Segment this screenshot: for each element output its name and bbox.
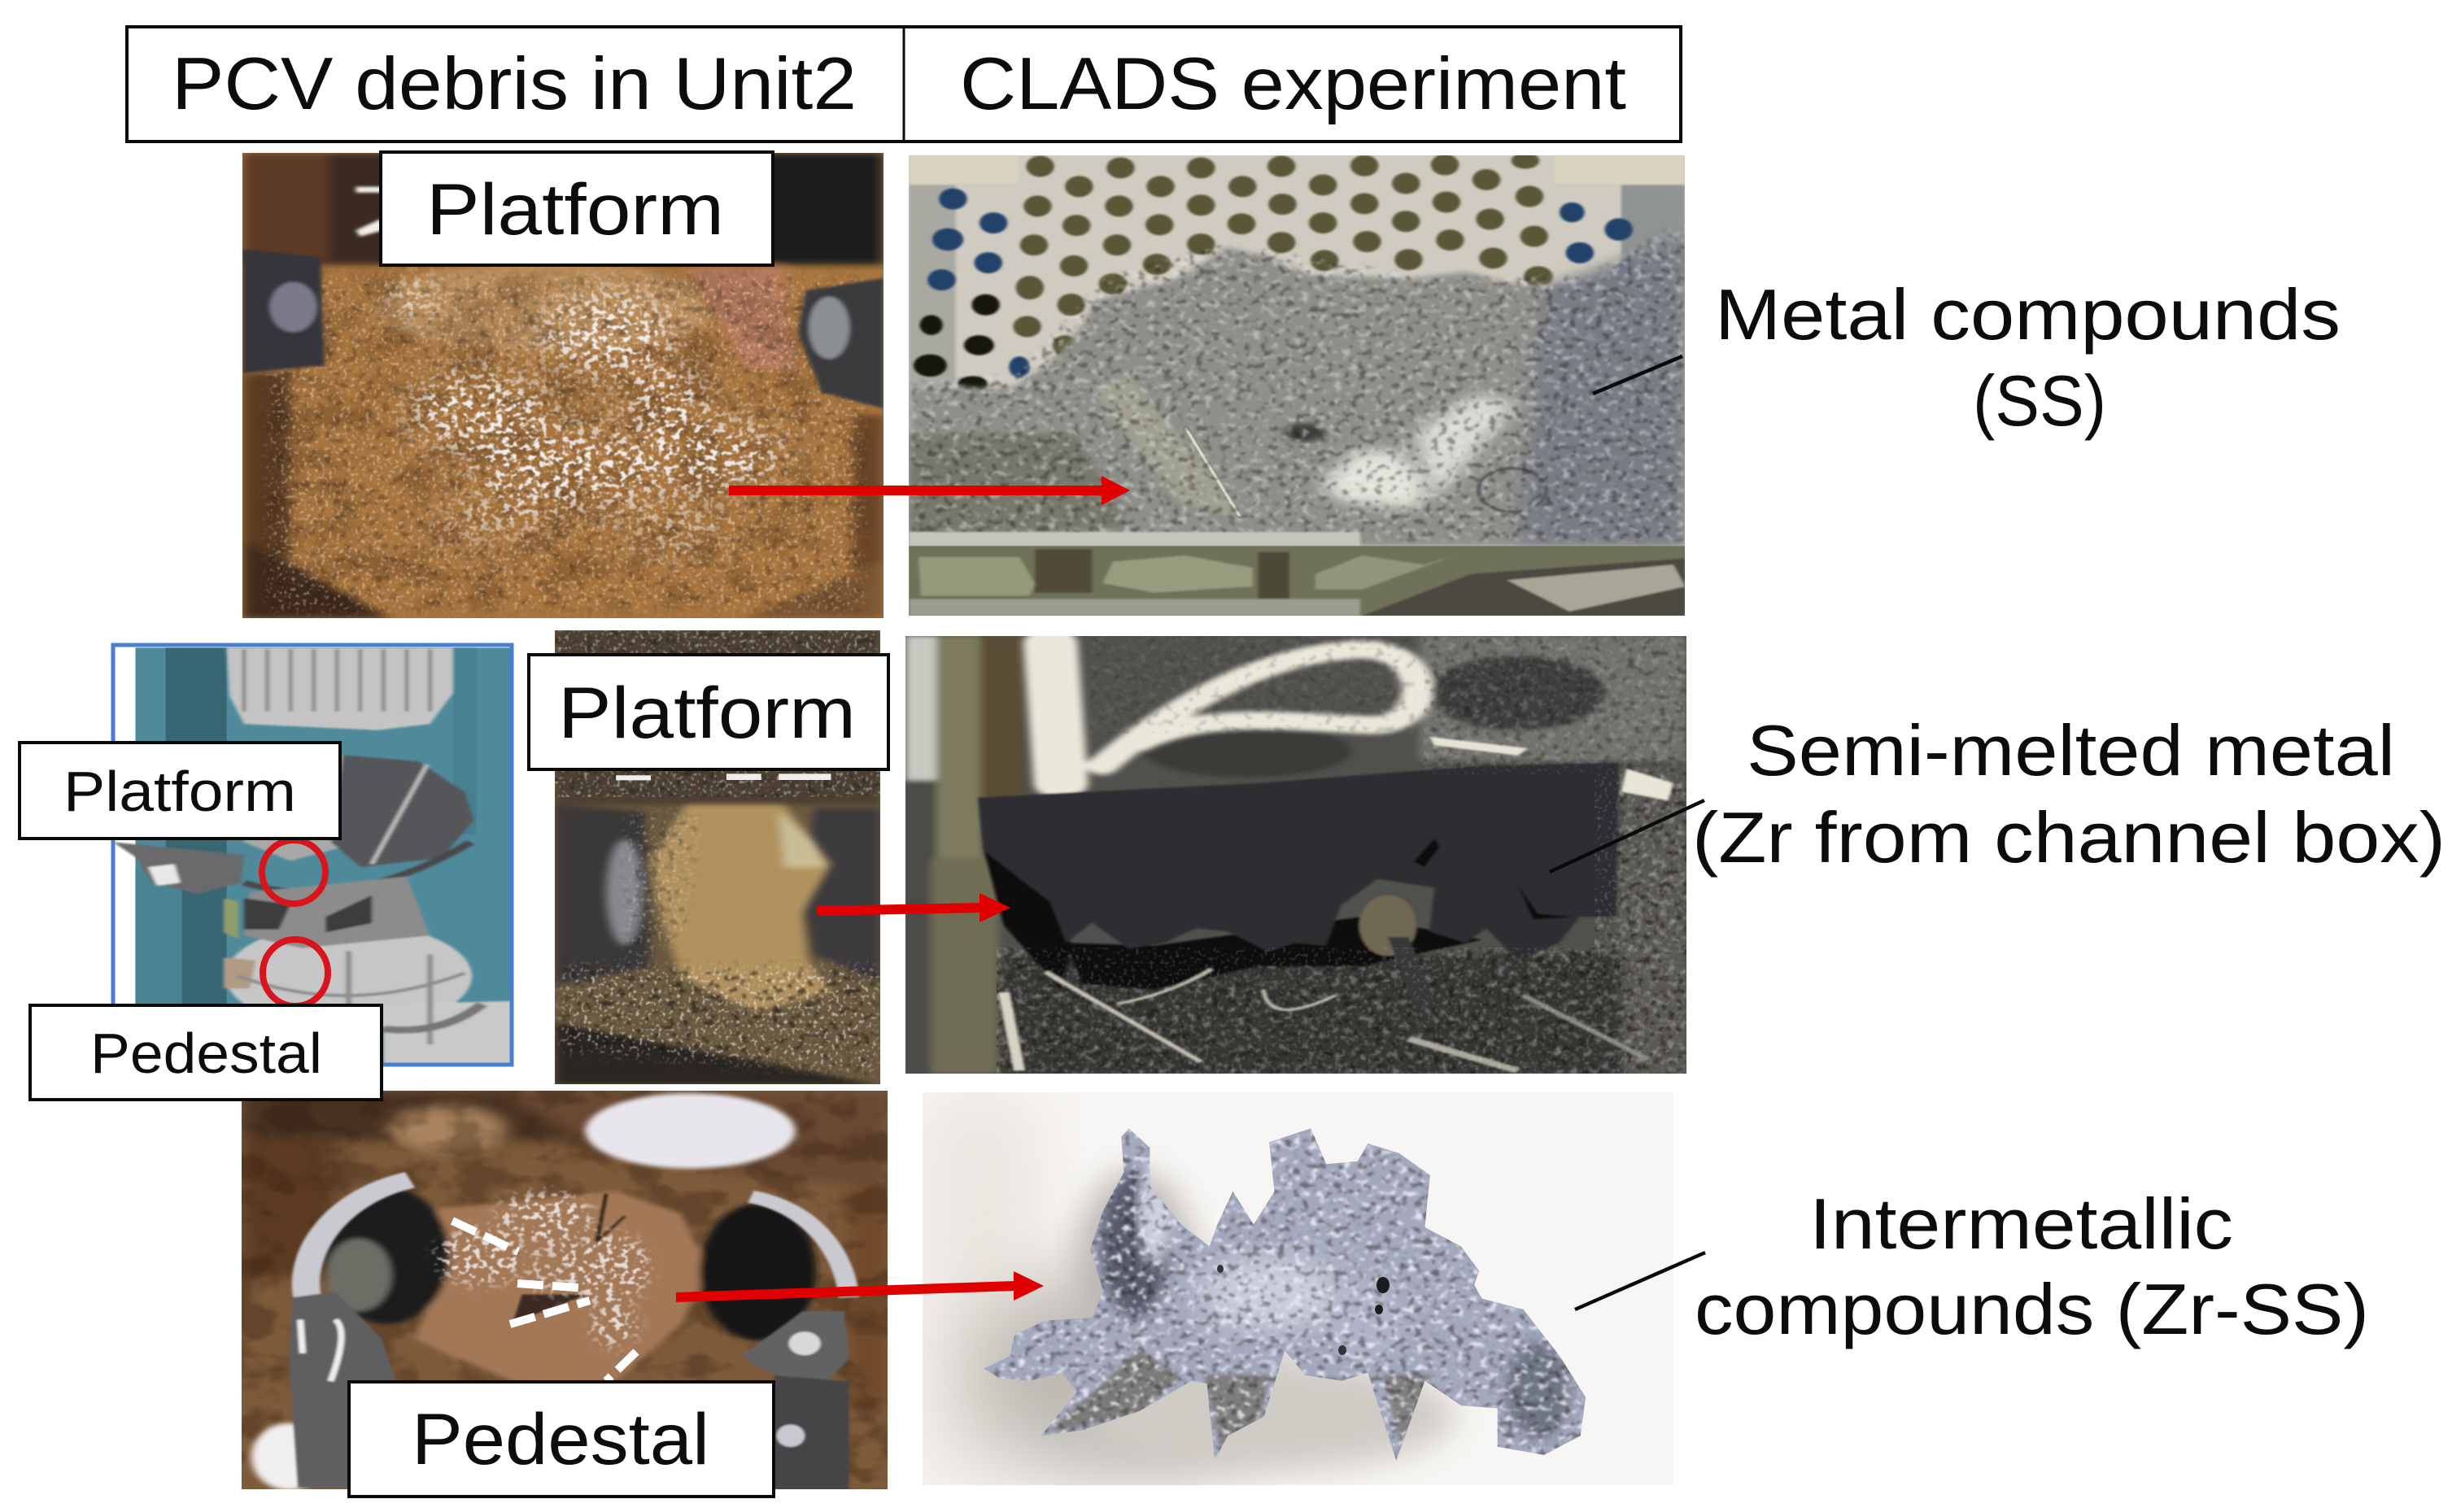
label: Platform top: Platform [426, 168, 724, 250]
label: Platform schematic [20, 743, 340, 839]
label: Pedestal bottom: Pedestal [412, 1398, 709, 1479]
label: Pedestal bottom [349, 1382, 774, 1497]
text: Semi-melted metal (Zr from channel box): Semi-melted metal [1747, 710, 2395, 791]
panel: plant schematic [113, 645, 513, 1066]
text: Intermetallic compounds (Zr-SS): Intermetallic [1809, 1183, 2233, 1264]
heading: CLADS experiment: CLADS experiment [960, 43, 1626, 125]
label: Platform schematic: Platform [63, 760, 296, 823]
heading: PCV debris in Unit2: PCV debris in Unit2 [172, 43, 857, 125]
marks: dashed white lines on pedestal [452, 1221, 636, 1381]
text: Intermetallic compounds (Zr-SS): compounds (Zr-SS) [1695, 1269, 2369, 1349]
arrow: platform to metal compounds [729, 476, 1130, 505]
panel: PCV semi-melted photo [555, 630, 880, 1085]
marker: platform circle [262, 840, 325, 904]
label: Platform middle: Platform [558, 672, 856, 753]
text: Intermetallic compounds (Zr-SS) [1695, 1183, 2369, 1349]
header: table row [127, 27, 1681, 142]
label: Platform middle [529, 655, 888, 769]
panel: PCV pedestal photo [242, 1091, 888, 1490]
text: Semi-melted metal (Zr from channel box) [1692, 710, 2445, 878]
label: Platform top [381, 152, 773, 265]
panel: CLADS intermetallic photo [923, 1092, 1673, 1485]
leader line: intermetallic [1575, 1253, 1705, 1309]
label: Pedestal schematic: Pedestal [90, 1022, 322, 1085]
leader line: semi-melted metal [1550, 800, 1704, 872]
text: Metal compounds (SS): Metal compounds [1715, 274, 2341, 355]
icon: schematic border [113, 645, 512, 1065]
panel: CLADS metal compounds photo [909, 153, 1685, 616]
text: Semi-melted metal (Zr from channel box): (Zr from channel box) [1692, 797, 2445, 878]
marker: pedestal circle [263, 939, 328, 1006]
arrow: platform to semi-melted metal [817, 893, 1010, 922]
panel: PCV platform photo [242, 153, 884, 618]
text: Metal compounds (SS) [1715, 274, 2341, 441]
leader line: metal compounds [1593, 356, 1682, 394]
arrow: pedestal to intermetallic [676, 1271, 1044, 1302]
panel: CLADS semi-melted metal photo [905, 636, 1686, 1074]
text: Metal compounds (SS): (SS) [1973, 360, 2106, 441]
label: Pedestal schematic [30, 1005, 382, 1100]
